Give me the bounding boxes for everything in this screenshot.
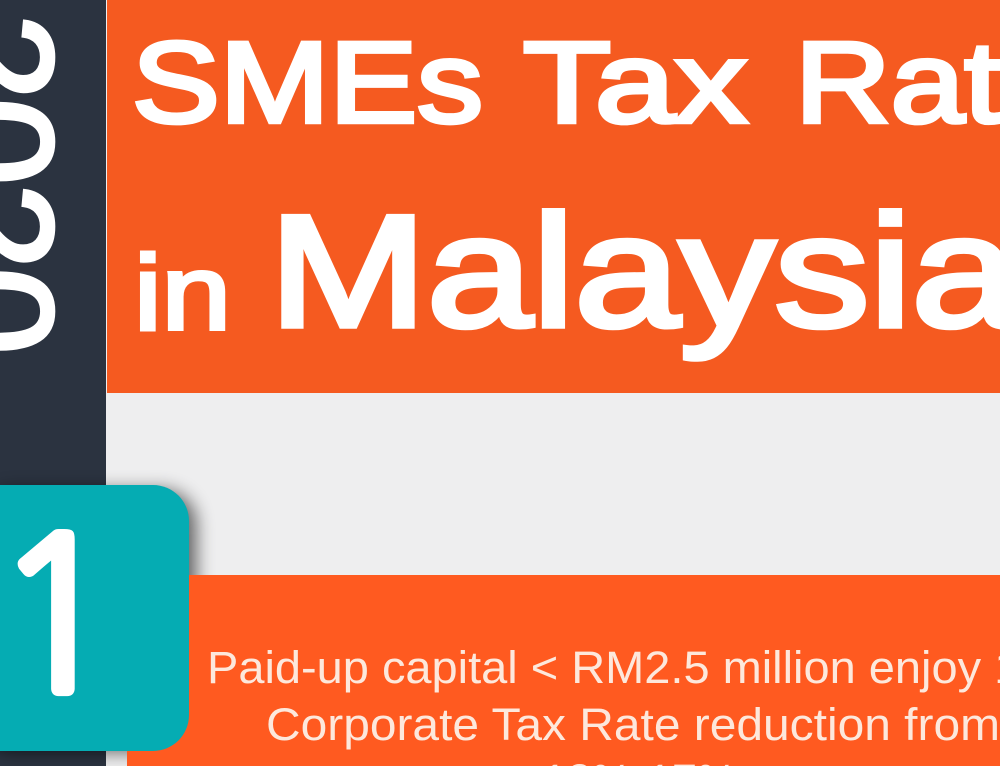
title line 2: Malaysia: Malaysia — [269, 182, 1000, 360]
card text: Corporate Tax Rate reduction from — [266, 699, 1000, 750]
number badge — [0, 485, 189, 751]
title line 1: Tax — [523, 19, 747, 147]
card text — [207, 642, 1000, 766]
title line 2: in: in — [134, 234, 231, 352]
background panel — [107, 393, 1000, 766]
card: tax reduction — [127, 575, 1000, 766]
sidebar — [0, 0, 106, 766]
header banner — [107, 0, 1000, 393]
title line 1: SMEs — [132, 19, 483, 147]
number badge shadow — [0, 490, 196, 752]
